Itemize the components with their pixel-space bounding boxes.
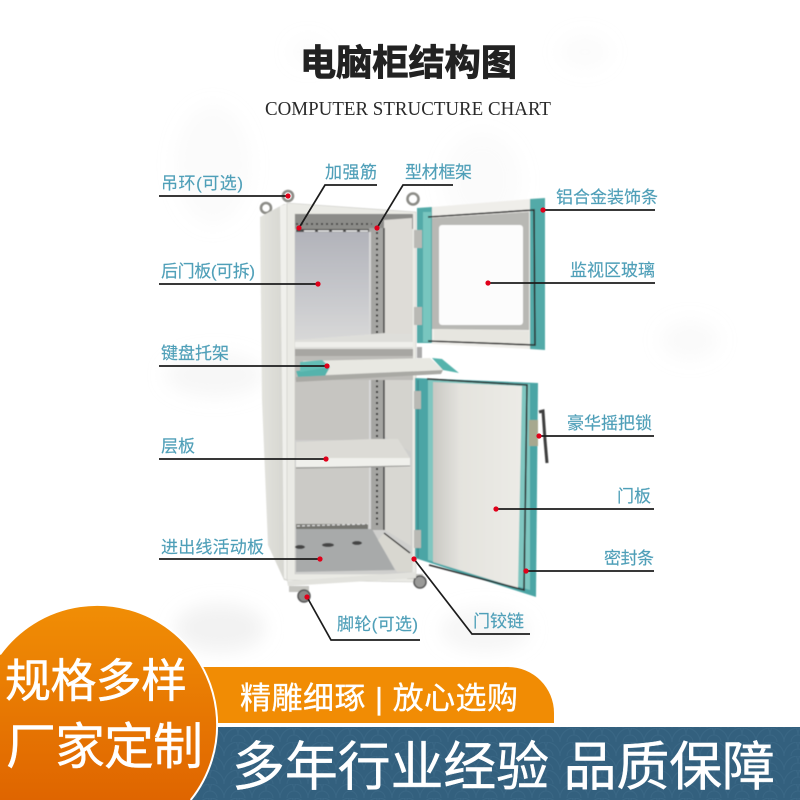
cabinet diagram (260, 191, 547, 602)
subtitle: COMPUTER STRUCTURE CHART (265, 98, 551, 120)
top reinforcement rib (295, 214, 413, 229)
casters (289, 574, 426, 602)
orange circle badge (0, 605, 217, 800)
cabinet front frame (287, 203, 416, 582)
label: 后门板: 后门板(可拆) (161, 262, 255, 281)
label: 豪华摇把锁 (536, 413, 654, 439)
label: 吊环 (159, 174, 291, 199)
access door (414, 378, 547, 597)
label: 型材框架 (374, 163, 472, 231)
badge line 1: 规格多样 (5, 655, 187, 707)
tab text: 精雕细琢 | 放心选购 (240, 681, 518, 716)
cable entry plate (295, 524, 412, 572)
shelf (296, 439, 410, 468)
banner: blue band (0, 727, 800, 800)
label: 豪华摇把锁: 豪华摇把锁 (567, 413, 652, 433)
label: 门铰链 (411, 556, 530, 634)
label: 加强筋: 加强筋 (325, 163, 377, 182)
keyboard tray (296, 347, 459, 382)
eye bolts (261, 191, 418, 213)
window glass (439, 225, 523, 325)
band text: 多年行业经验 品质保障 (232, 738, 775, 797)
profile frame posts (369, 228, 384, 530)
label: 监视区玻璃 (485, 261, 655, 286)
label: 门板: 门板 (617, 487, 651, 506)
label: 脚轮: 脚轮(可选) (337, 615, 418, 634)
label: 键盘托架 (159, 344, 330, 369)
label: 门铰链: 门铰链 (473, 612, 524, 631)
cabinet side panel (260, 204, 288, 581)
label: 门板 (493, 487, 654, 512)
badge line 2: 厂家定制 (6, 719, 203, 775)
middle shelf under monitor bay (295, 333, 412, 349)
base rail (287, 572, 416, 586)
label: 键盘托架: 键盘托架 (161, 344, 229, 363)
label: 进出线活动板 (159, 538, 323, 562)
label: 密封条: 密封条 (604, 549, 654, 568)
background ink wash (165, 34, 720, 652)
label: 密封条 (523, 549, 654, 574)
label: 铝合金装饰条 (540, 188, 658, 213)
title: 电脑柜结构图 (300, 42, 517, 83)
label: 加强筋 (296, 163, 377, 231)
label: 型材框架: 型材框架 (405, 163, 472, 182)
rocker handle lock (539, 411, 547, 463)
label: 铝合金装饰条: 铝合金装饰条 (556, 188, 658, 207)
label: 脚轮 (304, 594, 420, 640)
monitoring door (414, 198, 545, 350)
label: 吊环: 吊环(可选) (161, 174, 243, 193)
label: 后门板 (159, 262, 321, 287)
label: 层板: 层板 (161, 437, 195, 456)
label: 监视区玻璃: 监视区玻璃 (570, 261, 655, 280)
label: 进出线活动板: 进出线活动板 (161, 538, 264, 557)
banner: orange tab (100, 667, 554, 723)
right interior wall (384, 218, 412, 335)
rear door panel (295, 214, 412, 574)
label: 层板 (159, 437, 329, 462)
